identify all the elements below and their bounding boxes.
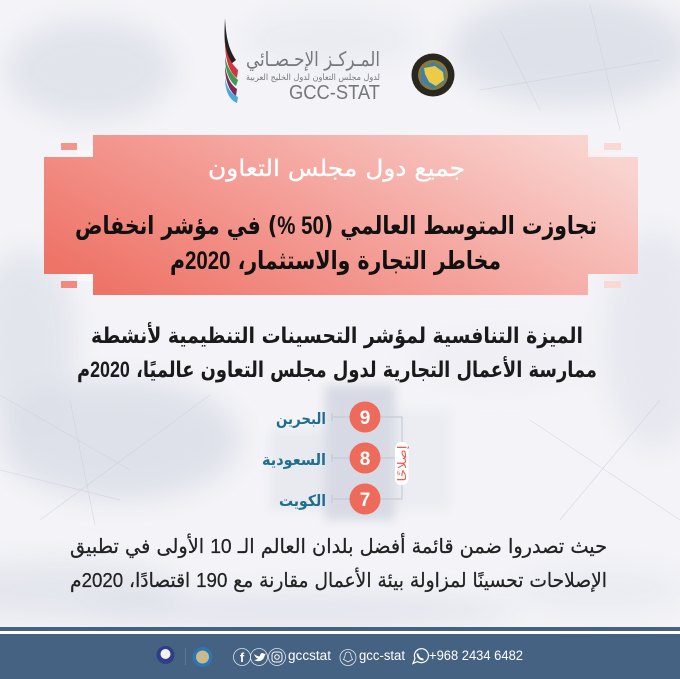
banner headline: مخاطر التجارة والاستثمار، 2020م <box>170 246 501 276</box>
banner headline <box>75 211 597 276</box>
rank: Bahrain 9: 9 <box>360 408 370 429</box>
icon: GCC emblem <box>412 54 454 96</box>
rank: Saudi Arabia 8: السعودية <box>262 451 326 469</box>
panel: headline banner <box>44 135 638 295</box>
rank: Bahrain 9 <box>276 402 380 432</box>
banner subtitle: جميع دول مجلس التعاون <box>208 156 465 182</box>
logo: GCC-STAT wordmark: لدول مجلس التعاون لدول الخليج العربية <box>246 73 380 83</box>
banner headline: تجاوزت المتوسط العالمي (50 %) في مؤشر انخفاض <box>75 211 597 241</box>
text block: closing statement <box>70 533 607 592</box>
logo: GCC-STAT wordmark <box>246 47 380 104</box>
rank: Saudi Arabia 8 <box>262 442 380 474</box>
logo: GCC-STAT wordmark: المـركـز الإحـصـائي <box>246 47 380 72</box>
icon: Facebook <box>234 648 250 666</box>
text block: closing statement: الإصلاحات تحسينًا لمزاولة بيئة الأعمال مقارنة مع 190 اقتصادًا، 2020م <box>70 568 607 592</box>
text block: closing statement: حيث تصدروا ضمن قائمة أفضل بلدان العالم الـ 10 الأولى في تطبيق <box>70 533 607 559</box>
logo: GCC-STAT wordmark: GCC-STAT <box>289 82 380 104</box>
social handle: gccstat: gccstat <box>288 648 331 663</box>
rank: Kuwait 7 <box>279 484 380 514</box>
icon: WhatsApp <box>413 649 428 664</box>
icon: certification badge <box>156 646 174 664</box>
rank: Kuwait 7: الكويت <box>279 492 326 510</box>
icon: Facebook: f <box>240 650 245 665</box>
callout: reforms pill: إصلاحًا <box>395 446 409 482</box>
icon: Instagram <box>268 648 286 666</box>
heading: competitive advantage <box>77 321 597 383</box>
phone number: +968 2434 6482 <box>429 648 523 663</box>
logo: GCC-STAT swoosh <box>225 18 238 103</box>
heading: competitive advantage: الميزة التنافسية لمؤشر التحسينات التنظيمية لأنشطة <box>91 321 583 349</box>
social handle: gcc-stat: gcc-stat <box>359 648 405 663</box>
icon: TUV badge <box>192 647 212 667</box>
footer <box>0 627 680 679</box>
icon: Snapchat <box>340 650 356 666</box>
rank: Kuwait 7: 7 <box>360 490 370 511</box>
rank: Saudi Arabia 8: 8 <box>360 449 370 470</box>
icon: Twitter <box>250 648 268 666</box>
chart: country ranking <box>262 402 409 514</box>
rank: Bahrain 9: البحرين <box>276 410 326 428</box>
